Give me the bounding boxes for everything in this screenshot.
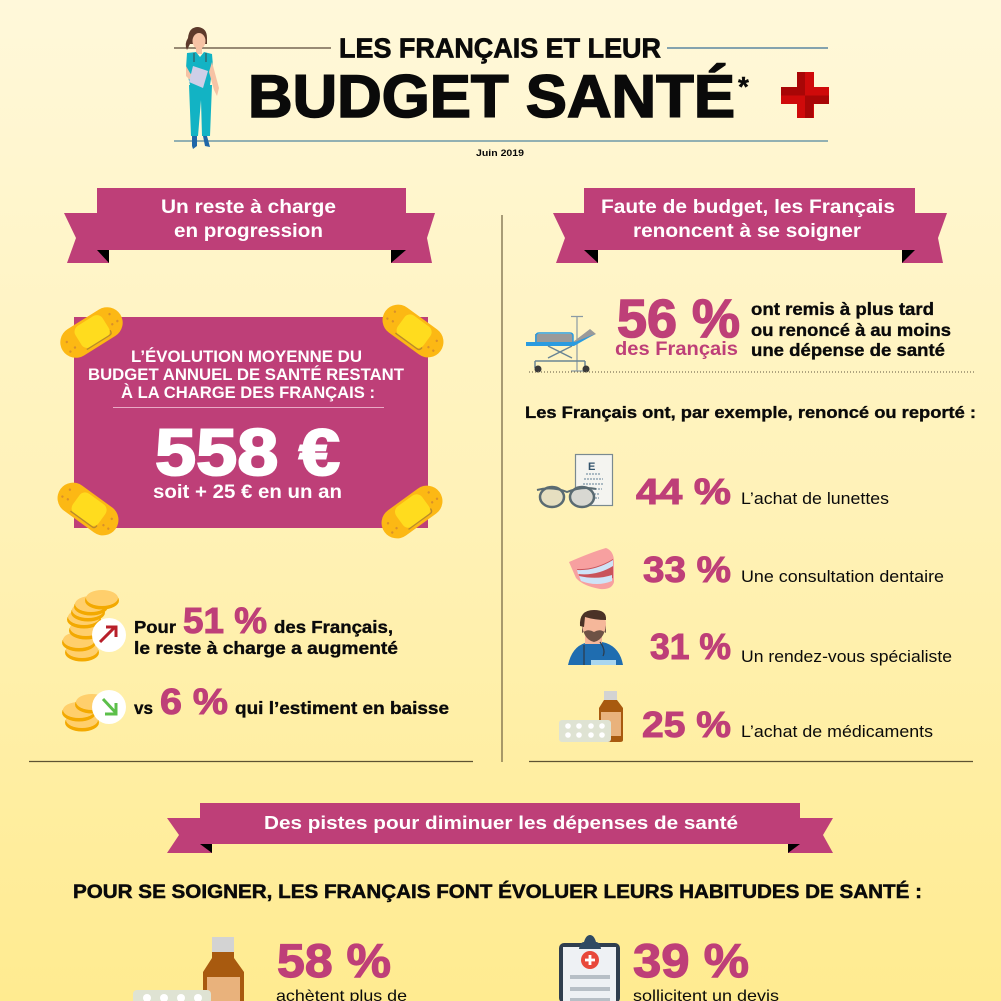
stat text: des Français, xyxy=(274,617,393,637)
stat: 6 percent decrease xyxy=(62,681,449,732)
icon: stretcher xyxy=(526,316,596,372)
stat text: Pour xyxy=(134,617,176,637)
stat text: 6 % xyxy=(160,681,228,722)
big number: 56 % xyxy=(617,289,740,349)
banner text: en progression xyxy=(174,220,323,242)
card heading xyxy=(88,347,404,402)
percentage: 33 % xyxy=(643,549,731,590)
item: generics xyxy=(133,934,407,1001)
title line 2: BUDGET SANTÉ xyxy=(248,63,735,130)
item: glasses xyxy=(537,454,889,512)
big number caption: des Français xyxy=(615,339,738,360)
title line 1: LES FRANÇAIS ET LEUR xyxy=(339,32,661,64)
asterisk: * xyxy=(738,71,749,102)
item: specialist xyxy=(568,610,952,667)
stat text: ont remis à plus tard xyxy=(751,299,934,319)
card heading: À LA CHARGE DES FRANÇAIS : xyxy=(121,383,375,402)
banner text: Des pistes pour diminuer les dépenses de santé xyxy=(264,812,738,833)
icon: glasses and eye chart xyxy=(537,454,612,507)
banner text: renoncent à se soigner xyxy=(633,220,861,242)
icon: doctor xyxy=(568,610,623,665)
date: Juin 2019 xyxy=(476,148,524,159)
column dividers xyxy=(29,215,973,762)
percentage: 44 % xyxy=(636,471,731,512)
stat: 56 percent xyxy=(526,289,951,372)
stat text: le reste à charge a augmenté xyxy=(134,638,398,658)
banner text: Faute de budget, les Français xyxy=(601,196,895,218)
amount: 558 € xyxy=(155,415,340,489)
banner text xyxy=(161,196,336,242)
percentage: 58 % xyxy=(277,934,391,987)
stat text xyxy=(751,299,951,360)
label: Un rendez-vous spécialiste xyxy=(741,648,952,666)
stat text: ou renoncé à au moins xyxy=(751,320,951,340)
percentage: 31 % xyxy=(650,626,731,667)
banner: renoncent xyxy=(553,188,947,263)
icon: dentures xyxy=(569,548,614,589)
percentage: 39 % xyxy=(633,934,749,987)
label: L’achat de lunettes xyxy=(741,490,889,508)
subheading: examples: Les Français ont, par exemple, renoncé ou reporté : xyxy=(525,403,976,422)
stat text xyxy=(134,681,449,722)
icon: red cross xyxy=(781,72,829,118)
label: L’achat de médicaments xyxy=(741,723,933,741)
panel: budget card xyxy=(51,298,450,545)
percentage: 25 % xyxy=(642,704,731,745)
amount note: soit + 25 € en un an xyxy=(153,482,342,503)
banner: pistes xyxy=(167,803,833,853)
item: medication xyxy=(559,691,933,745)
item: quote xyxy=(559,934,779,1001)
card heading: L’ÉVOLUTION MOYENNE DU xyxy=(131,347,362,366)
icon: clipboard xyxy=(559,935,620,1001)
banner: reste a charge xyxy=(64,188,435,263)
stat text: une dépense de santé xyxy=(751,340,945,360)
icon: nurse xyxy=(186,27,219,149)
item: dentist xyxy=(569,548,944,590)
icon: glasses and eye chart: E xyxy=(588,461,595,473)
card heading: BUDGET ANNUEL DE SANTÉ RESTANT xyxy=(88,365,404,384)
banner text xyxy=(601,196,895,242)
icon: bottle and blister xyxy=(559,691,623,742)
header rules xyxy=(174,48,828,141)
stat text: 51 % xyxy=(183,600,267,641)
stat text: qui l’estiment en baisse xyxy=(235,698,449,718)
stat: 51 percent increase xyxy=(62,590,398,662)
header xyxy=(174,27,829,159)
icon: bandages xyxy=(51,298,450,545)
stat text: vs xyxy=(134,698,153,718)
icon: bottle and blister xyxy=(133,937,244,1001)
label: Une consultation dentaire xyxy=(741,568,944,586)
heading: habits: POUR SE SOIGNER, LES FRANÇAIS FONT ÉVOLUER LEURS HABITUDES DE SANTÉ : xyxy=(73,881,922,903)
icon: rising coins xyxy=(62,590,126,662)
icon: falling coins xyxy=(62,690,126,732)
stat text xyxy=(134,600,398,658)
banner text: Un reste à charge xyxy=(161,196,336,218)
